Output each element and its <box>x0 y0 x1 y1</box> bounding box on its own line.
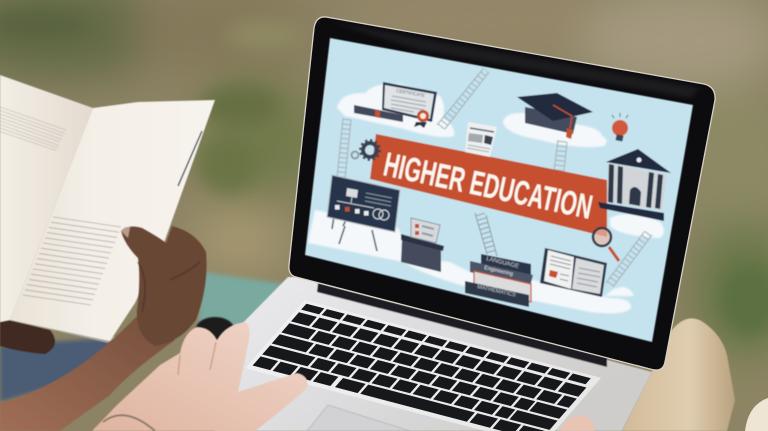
left page text <box>0 107 66 150</box>
tab key <box>285 328 312 335</box>
home row <box>312 348 531 406</box>
ladders <box>337 69 652 287</box>
light-skinned hand on the laptop <box>92 322 595 431</box>
ladder: lower right <box>606 232 652 287</box>
return key <box>533 406 563 414</box>
left shift <box>266 350 312 362</box>
caps key <box>276 339 310 348</box>
right shift <box>513 415 554 425</box>
dark-skinned arm and hand holding the book <box>0 226 207 431</box>
jeans <box>0 338 130 402</box>
laptop screen bezel <box>289 17 715 370</box>
icon: desk with monitor <box>401 218 444 272</box>
icon: stack of books: LANGUAGE <box>486 256 519 270</box>
ladder: left <box>337 118 351 180</box>
trackpad <box>307 405 410 431</box>
bottom-left modifier keys <box>257 361 336 382</box>
open book in hand <box>0 75 215 354</box>
banner <box>370 134 607 237</box>
right page text <box>23 217 121 305</box>
qwerty row <box>315 336 573 403</box>
keyboard <box>245 300 601 431</box>
laptop display graphic <box>305 38 693 342</box>
laptop base <box>215 277 652 431</box>
trousers: beige knee <box>622 318 768 431</box>
dark knee object <box>196 317 234 341</box>
teal bench behind the laptop <box>198 272 290 330</box>
left page <box>0 75 93 322</box>
icon: graduation cap <box>517 93 593 139</box>
icon: stack of books: Engineering <box>484 265 514 278</box>
icon: certificate: CERTIFICATE <box>396 88 425 98</box>
delete key <box>562 387 582 392</box>
bracelet <box>103 415 155 431</box>
icon: newspaper <box>465 122 497 157</box>
ladder: upper centre <box>437 69 489 129</box>
icon: light bulb <box>612 113 628 142</box>
right page <box>10 100 215 341</box>
function row <box>304 307 590 382</box>
banner title: HIGHER EDUCATION <box>380 146 596 227</box>
left hand fingers under the book <box>0 318 55 354</box>
clouds <box>308 84 664 313</box>
ladder: under cap <box>554 140 567 172</box>
book marker edge <box>178 131 202 186</box>
hinge <box>317 283 607 367</box>
second hand fingertip <box>560 415 595 431</box>
icon: open book <box>540 248 607 297</box>
icon: presentation board <box>327 175 400 251</box>
display background <box>305 38 693 342</box>
icon: stack of books <box>465 254 533 307</box>
icon: stack of books: MATHEMATICS <box>477 284 516 299</box>
icon: magnifier <box>593 228 619 261</box>
icon: gears <box>352 140 380 160</box>
lower letter row <box>314 362 511 414</box>
icon: certificate <box>354 82 437 128</box>
ladder: under banner <box>475 213 497 256</box>
book back cover edge <box>10 313 118 343</box>
icon: university building <box>598 149 671 221</box>
right modifier keys <box>473 418 544 431</box>
command key <box>339 383 362 388</box>
number row <box>295 317 561 386</box>
space bar <box>364 389 471 417</box>
